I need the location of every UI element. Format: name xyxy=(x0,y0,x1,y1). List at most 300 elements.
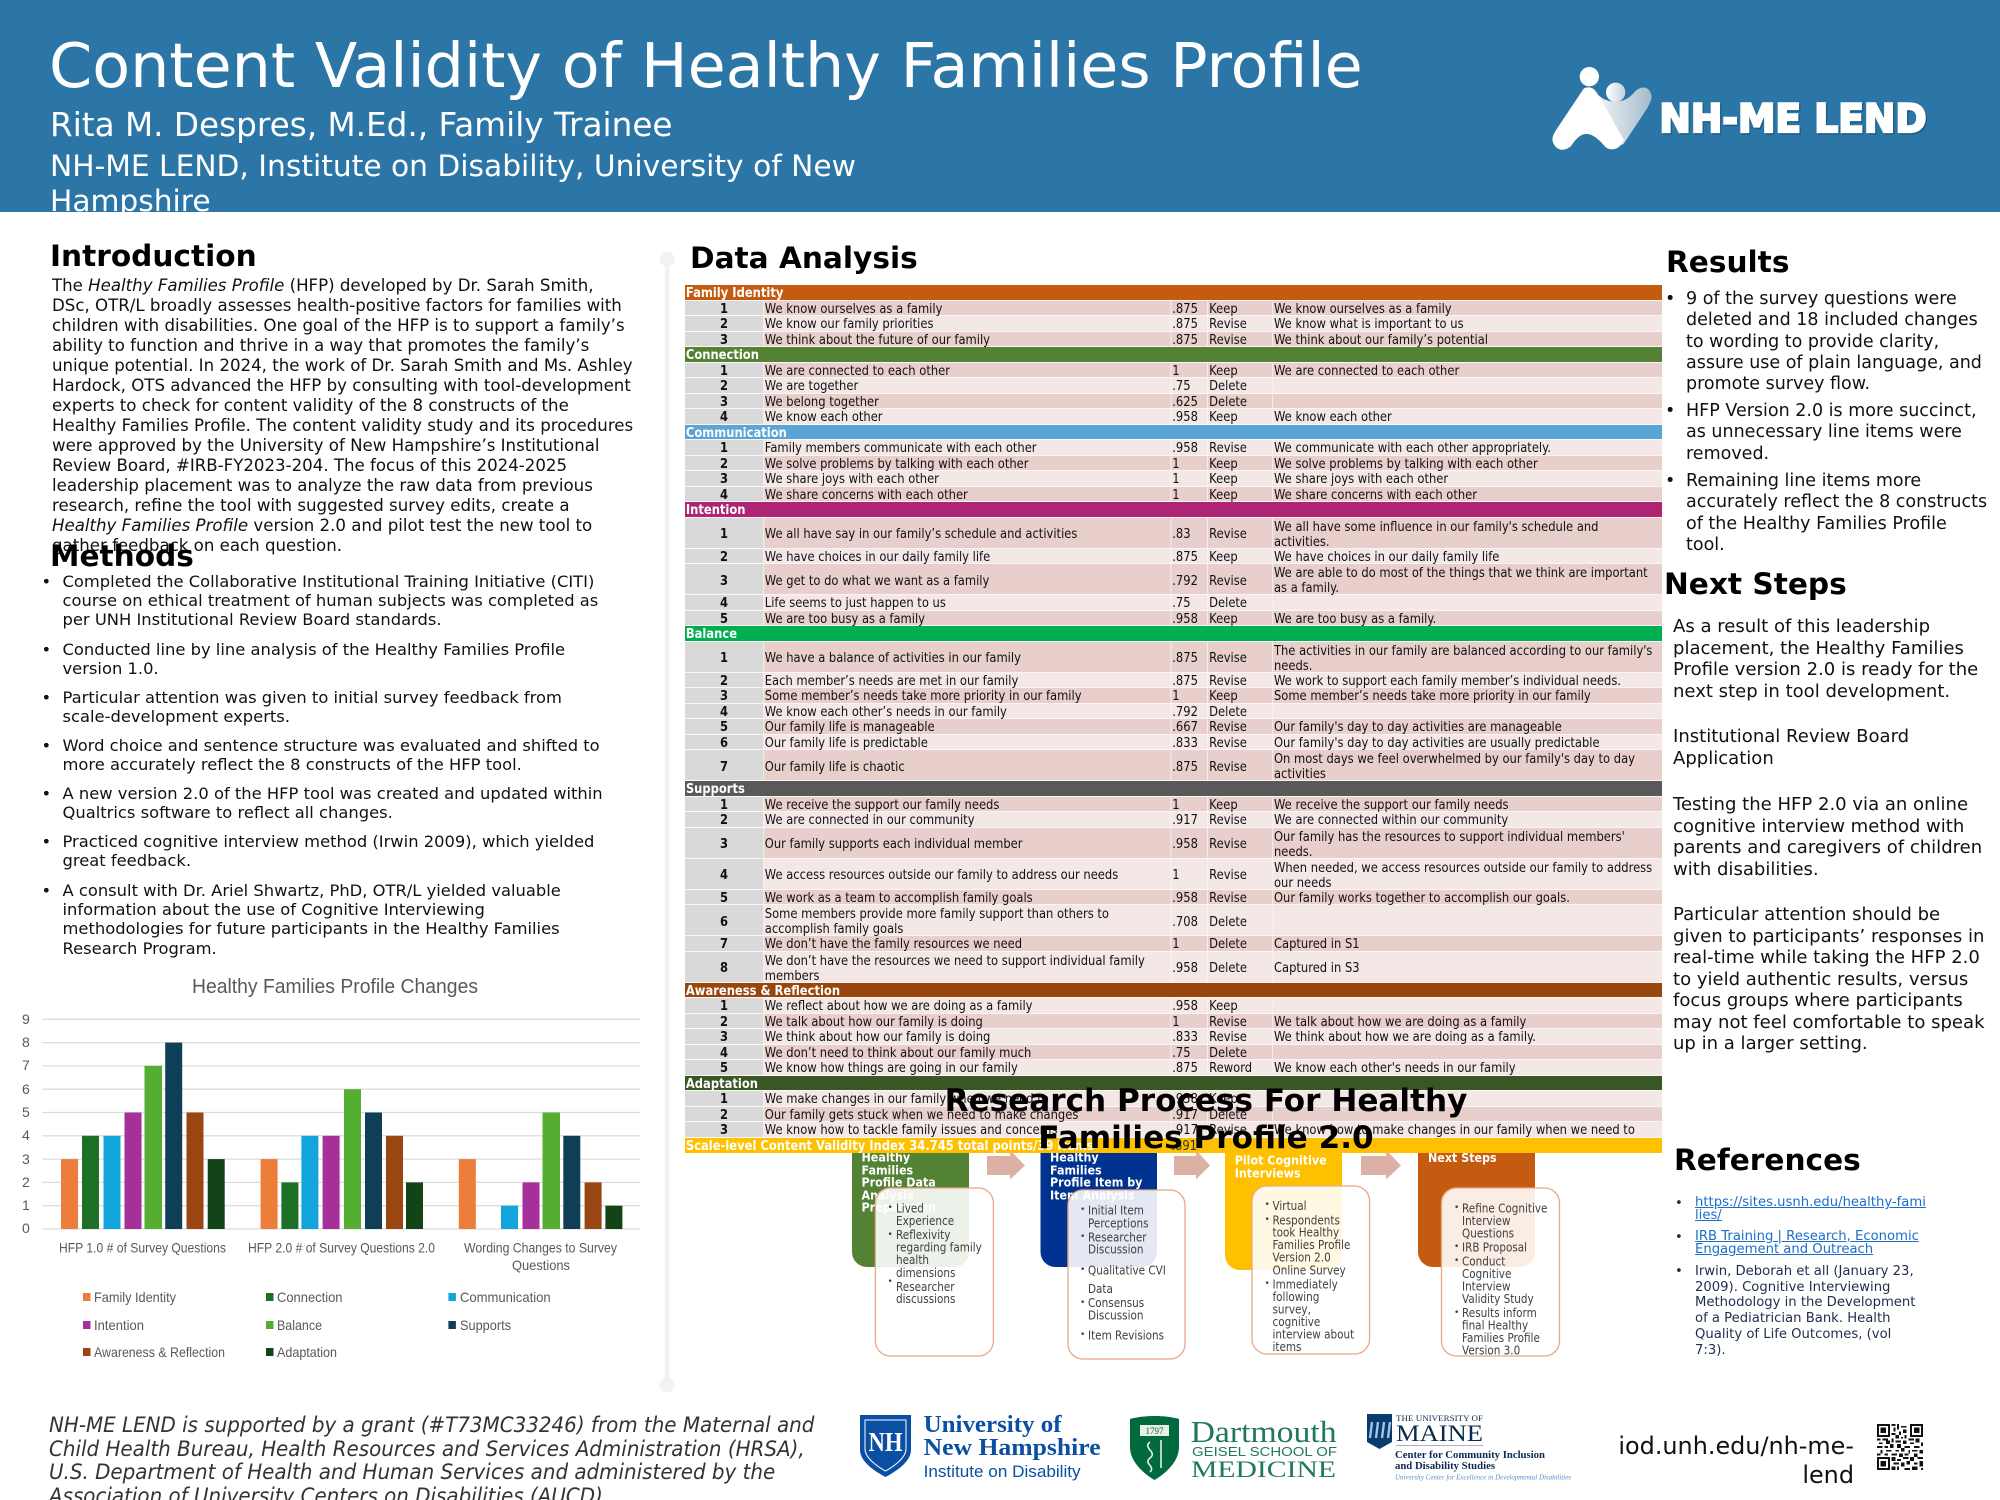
step 3: pilot cognitive interviews: took Healthy xyxy=(1272,1226,1339,1240)
divider rail xyxy=(660,252,674,1392)
logo: University of New Hampshire: University of xyxy=(924,1412,1063,1438)
section: Balance: Our family's day to day activities are usually predictable xyxy=(1274,736,1600,750)
section: Family Identity: Revise xyxy=(1209,332,1247,348)
section: Communication: Keep xyxy=(1209,456,1238,472)
intro paragraph: unique potential. In 2024, the work of Dr. Sarah Smith and Ms. Ashley xyxy=(52,356,633,375)
logo: University of New Hampshire xyxy=(860,1412,1101,1481)
section: Supports: needs. xyxy=(1274,844,1312,860)
heading: Research Process: Families Profile 2.0 xyxy=(1038,1120,1374,1156)
step 1: data analysis preparation xyxy=(852,1153,994,1357)
section: Communication: 3 xyxy=(720,472,728,487)
website link xyxy=(1618,1432,1854,1489)
section: Connection: We know each other xyxy=(765,410,883,425)
intro paragraph: Healthy Families Profile version 2.0 and pilot test the new tool to xyxy=(52,516,592,535)
section: Intention: .958 xyxy=(1172,612,1198,626)
methods list: Research Program. xyxy=(62,939,217,958)
section: Balance: Revise xyxy=(1209,651,1247,666)
section: Balance: Our family's day to day activities are manageable xyxy=(1274,720,1562,735)
section: Intention: 5 xyxy=(720,612,728,626)
section: Connection: We know each other xyxy=(1274,410,1392,425)
section: Intention: We are too busy as a family xyxy=(765,612,925,626)
intro paragraph: research, refine the tool with suggested survey edits, create a xyxy=(52,496,570,515)
methods list: scale-development experts. xyxy=(62,707,290,726)
section: Supports: 6 xyxy=(720,914,728,930)
heading: Research Process: Research Process For Healthy xyxy=(945,1083,1467,1119)
legend: Intention xyxy=(94,1317,144,1333)
section: Family Identity: We know our family priorities xyxy=(765,317,933,332)
intro paragraph: gather feedback on each question. xyxy=(52,536,342,555)
results list: promote survey flow. xyxy=(1686,374,1870,394)
section: Family Identity: We know what is important to us xyxy=(1274,317,1464,332)
section: Supports: 1 xyxy=(1172,868,1180,883)
section: Communication: .958 xyxy=(1172,441,1198,456)
step 2: item by item analysis: Profile Item by xyxy=(1050,1175,1143,1190)
category labels: Wording Changes to Survey xyxy=(464,1240,617,1256)
section: Balance: Revise xyxy=(1209,720,1247,735)
heading: Methods: Methods xyxy=(50,539,194,573)
step 1: data analysis preparation: Preparation xyxy=(862,1200,936,1215)
section: Supports: 1 xyxy=(1172,798,1180,812)
references list: Quality of Life Outcomes, (vol xyxy=(1695,1327,1891,1342)
section: Adaptation: 1 xyxy=(720,1092,728,1107)
step 1: data analysis preparation: Experience xyxy=(896,1214,954,1228)
category labels xyxy=(59,1240,617,1273)
section: Supports: Some members provide more family support than others to xyxy=(765,907,1109,922)
step 2: item by item analysis: Healthy xyxy=(1050,1150,1099,1165)
step 2: item by item analysis: Discussion xyxy=(1088,1309,1143,1323)
section: Supports: accomplish family goals xyxy=(765,922,903,937)
step 4: next steps: Version 3.0 xyxy=(1462,1344,1520,1358)
section: Family Identity: .875 xyxy=(1172,317,1198,332)
section: Supports: Our family has the resources to support individual members' xyxy=(1274,830,1625,844)
axis and gridlines: 4 xyxy=(22,1127,30,1143)
results list: as unnecessary line items were xyxy=(1686,422,1962,442)
section: Supports: 1 xyxy=(720,798,728,812)
section: Supports: Revise xyxy=(1209,868,1247,883)
section: Balance: .875 xyxy=(1172,651,1198,666)
section: Awareness & Reflection: We think about how our family is doing xyxy=(765,1030,990,1045)
step 1: data analysis preparation: Researcher xyxy=(896,1280,955,1294)
next steps text: Institutional Review Board xyxy=(1673,726,1909,747)
section: Balance: .875 xyxy=(1172,674,1198,688)
section: Supports: 4 xyxy=(720,868,728,883)
section: Supports: We receive the support our family needs xyxy=(1274,798,1509,812)
section: Adaptation: 3 xyxy=(720,1123,728,1138)
section: Balance: Our family life is predictable xyxy=(765,736,928,750)
results list: accurately reflect the 8 constructs xyxy=(1686,492,1987,512)
section: Communication: 1 xyxy=(720,441,728,456)
methods list: per UNH Institutional Review Board standards. xyxy=(62,610,442,629)
section: Intention: We all have some influence in our family's schedule and xyxy=(1274,520,1599,534)
section: Supports: .708 xyxy=(1172,914,1198,930)
section: Supports: We receive the support our family needs xyxy=(765,798,999,812)
arrow 1 xyxy=(987,1153,1025,1180)
section: Supports: .917 xyxy=(1172,813,1198,828)
section: Connection: 2 xyxy=(720,379,728,394)
step 2: item by item analysis xyxy=(1040,1153,1186,1360)
section: Supports: Revise xyxy=(1209,890,1247,906)
section: Intention: .875 xyxy=(1172,550,1198,564)
section: Balance: needs. xyxy=(1274,658,1312,674)
section: Balance: Revise xyxy=(1209,760,1247,774)
logo: Dartmouth Geisel School of Medicine xyxy=(1130,1414,1337,1482)
step 2: item by item analysis: • xyxy=(1080,1330,1085,1340)
website link: lend xyxy=(1802,1461,1854,1489)
section: Balance: We have a balance of activities in our family xyxy=(765,651,1021,666)
section: Awareness & Reflection: We know how things are going in our family xyxy=(765,1061,1018,1076)
section: Connection: We are connected to each other xyxy=(765,364,950,378)
section: Balance: 1 xyxy=(1172,689,1180,704)
methods list: information about the use of Cognitive Interviewing xyxy=(62,900,485,919)
section: Balance: 7 xyxy=(720,760,728,774)
section: Awareness & Reflection: 5 xyxy=(720,1061,728,1076)
section: Family Identity xyxy=(685,285,1662,348)
step 4: next steps: • xyxy=(1454,1308,1459,1318)
next steps text: parents and caregivers of children xyxy=(1673,837,1982,858)
results list: to wording to provide clarity, xyxy=(1686,332,1939,352)
references list: of a Pediatrician Bank. Health xyxy=(1695,1311,1891,1326)
step 3: pilot cognitive interviews: Respondents xyxy=(1272,1214,1340,1228)
next steps text: to yield authentic results, versus xyxy=(1673,968,1968,990)
step 3: pilot cognitive interviews: • xyxy=(1264,1279,1270,1289)
section: Supports: Our family supports each individual member xyxy=(765,837,1023,852)
methods list: Word choice and sentence structure was evaluated and shifted to xyxy=(62,736,600,755)
legend: Awareness & Reflection xyxy=(94,1344,225,1360)
section: Adaptation: 2 xyxy=(720,1108,728,1122)
section: Adaptation: We know how to make changes in our family when we need to xyxy=(1274,1123,1635,1138)
logo: University of Maine: University Center for Excellence in Developmental Disabilities xyxy=(1395,1474,1571,1482)
intro paragraph: Review Board, #IRB-FY2023-204. The focus of this 2024-2025 xyxy=(52,456,567,475)
results list: of the Healthy Families Profile xyxy=(1686,514,1947,534)
step 2: item by item analysis: • xyxy=(1080,1205,1085,1215)
section: Balance: Revise xyxy=(1209,736,1247,750)
section: Communication: 2 xyxy=(720,456,728,472)
step 3: pilot cognitive interviews: Interviews xyxy=(1235,1166,1301,1181)
next steps text: As a result of this leadership xyxy=(1673,616,1930,637)
scale-level content validity index row xyxy=(685,1138,1662,1153)
logo: Dartmouth Geisel School of Medicine: GEISEL SCHOOL OF xyxy=(1192,1444,1337,1459)
intro paragraph: were approved by the University of New Hampshire’s Institutional xyxy=(52,436,600,455)
results list: HFP Version 2.0 is more succinct, xyxy=(1686,401,1977,421)
section: Connection: Keep xyxy=(1209,410,1238,425)
section: Balance: We know each other’s needs in our family xyxy=(765,704,1007,720)
next steps text xyxy=(1672,616,1985,1054)
QR code xyxy=(1877,1424,1923,1470)
intro paragraph: Hardock, OTS advanced the HFP by consulting with tool-development xyxy=(52,376,631,395)
step 3: pilot cognitive interviews: • xyxy=(1264,1200,1270,1210)
section: Communication: We communicate with each other appropriately. xyxy=(1274,441,1551,456)
results list: tool. xyxy=(1686,535,1725,555)
references list: Irwin, Deborah et all (January 23, xyxy=(1695,1264,1914,1279)
section: Intention: We all have say in our family’s schedule and activities xyxy=(765,527,1077,542)
section: Awareness & Reflection: .958 xyxy=(1172,999,1198,1014)
axis and gridlines: 3 xyxy=(22,1151,30,1167)
step 1: data analysis preparation: Lived xyxy=(896,1202,924,1216)
section: Connection: Delete xyxy=(1209,394,1247,410)
step 4: next steps: • xyxy=(1454,1203,1459,1213)
section: Awareness & Reflection xyxy=(685,983,1662,1076)
next steps text: placement, the Healthy Families xyxy=(1673,638,1964,658)
section: Supports: 7 xyxy=(720,937,728,952)
section: Family Identity: .875 xyxy=(1172,302,1198,316)
bars: HFP 2.0 xyxy=(261,1089,423,1229)
affiliation xyxy=(50,148,856,212)
section: Supports: .958 xyxy=(1172,837,1198,852)
section: Supports: members xyxy=(765,968,819,984)
references list: 7:3). xyxy=(1695,1343,1726,1358)
section: Supports: Delete xyxy=(1209,914,1247,930)
section: Awareness & Reflection: .833 xyxy=(1172,1030,1198,1045)
step 2: item by item analysis: Item Revisions xyxy=(1088,1329,1164,1343)
section: Family Identity: We know ourselves as a family xyxy=(765,302,942,316)
step 1: data analysis preparation: Reflexivity xyxy=(896,1228,951,1242)
section: Intention: 1 xyxy=(720,527,728,542)
section: Intention: We get to do what we want as a family xyxy=(765,574,989,588)
section: Supports: We don’t have the resources we need to support individual family xyxy=(765,954,1145,968)
section: Family Identity: We think about our family’s potential xyxy=(1274,332,1488,348)
section: Supports: Revise xyxy=(1209,813,1247,828)
references list: Methodology in the Development xyxy=(1695,1295,1915,1310)
section: Awareness & Reflection: Revise xyxy=(1209,1030,1247,1045)
funding statement xyxy=(49,1413,814,1500)
logo: University of New Hampshire: NH xyxy=(868,1427,902,1457)
legend xyxy=(83,1289,551,1360)
step 4: next steps: Conduct xyxy=(1462,1255,1506,1269)
section: Family Identity: 2 xyxy=(720,317,728,332)
section: Supports: We work as a team to accomplish family goals xyxy=(765,890,1033,906)
section: Balance: Revise xyxy=(1209,674,1247,688)
section: Awareness & Reflection: 4 xyxy=(720,1046,728,1060)
next steps text: may not feel comfortable to speak xyxy=(1673,1012,1985,1032)
section: Intention: 2 xyxy=(720,550,728,564)
section: Connection: 1 xyxy=(720,364,728,378)
references list: https://sites.usnh.edu/healthy-fami xyxy=(1695,1195,1926,1210)
section: Connection: 1 xyxy=(1172,364,1180,378)
step 1: data analysis preparation: Analysis xyxy=(862,1188,914,1203)
intro paragraph: experts to check for content validity of the 8 constructs of the xyxy=(52,396,569,415)
step 3: pilot cognitive interviews: Immediately xyxy=(1272,1278,1338,1292)
step 3: pilot cognitive interviews: Families Profile xyxy=(1272,1238,1350,1252)
section: Intention: 3 xyxy=(720,574,728,588)
section: Family Identity: Revise xyxy=(1209,317,1247,332)
title: Content Validity of Healthy Families Profile xyxy=(49,30,1363,102)
section: Adaptation xyxy=(685,1076,1662,1138)
section: Connection: Keep xyxy=(1209,364,1238,378)
section: Supports: Delete xyxy=(1209,937,1247,952)
axis and gridlines: 5 xyxy=(22,1104,30,1120)
section: Supports: our needs xyxy=(1274,876,1332,890)
section: Awareness & Reflection: We talk about how we are doing as a family xyxy=(1274,1014,1526,1030)
intro paragraph: DSc, OTR/L broadly assesses health-positive factors for families with xyxy=(52,296,622,315)
section: Adaptation: Our family gets stuck when we need to make changes xyxy=(765,1108,1078,1122)
section: Balance: 6 xyxy=(720,736,728,750)
section: Balance xyxy=(685,626,1662,782)
logo: NH-ME LEND xyxy=(1552,67,1928,150)
header banner xyxy=(0,0,2000,212)
step 2: item by item analysis: Families xyxy=(1050,1163,1102,1178)
website link: iod.unh.edu/nh-me- xyxy=(1618,1432,1854,1460)
intro paragraph: children with disabilities. One goal of the HFP is to support a family’s xyxy=(52,316,625,335)
step 2: item by item analysis: Consensus xyxy=(1088,1296,1144,1310)
section: Communication: We share concerns with each other xyxy=(765,488,968,502)
methods list: Practiced cognitive interview method (Irwin 2009), which yielded xyxy=(62,832,594,851)
next steps text: Profile version 2.0 is ready for the xyxy=(1673,659,1978,680)
chart title: Healthy Families Profile Changes xyxy=(192,976,478,998)
methods list xyxy=(44,572,603,958)
section: Communication: 1 xyxy=(1172,456,1180,472)
step 3: pilot cognitive interviews: • xyxy=(1264,1215,1270,1225)
step 1: data analysis preparation: Profile Data xyxy=(862,1175,936,1190)
section: Supports: We don’t have the family resources we need xyxy=(765,937,1022,952)
next steps text: next step in tool development. xyxy=(1673,680,1950,702)
step 2: item by item analysis: Discussion xyxy=(1088,1243,1143,1257)
section: Intention: We have choices in our daily family life xyxy=(1274,550,1499,564)
funding statement: NH-ME LEND is supported by a grant (#T73MC33246) from the Maternal and xyxy=(49,1413,814,1438)
section: Intention xyxy=(685,502,1662,626)
intro paragraph: ability to function and thrive in a way that promotes the family’s xyxy=(52,336,589,355)
section: Awareness & Reflection: 1 xyxy=(720,999,728,1014)
step 1: data analysis preparation: • xyxy=(888,1203,893,1213)
section: Balance: Delete xyxy=(1209,704,1247,720)
step 1: data analysis preparation: Healthy xyxy=(862,1150,910,1165)
section: Intention: Life seems to just happen to us xyxy=(765,596,946,611)
step 4: next steps: Next Steps xyxy=(1428,1150,1497,1165)
category labels: HFP 2.0 # of Survey Questions 2.0 xyxy=(248,1240,435,1256)
section: Awareness & Reflection: Revise xyxy=(1209,1014,1247,1030)
references list xyxy=(1675,1195,1926,1358)
section: Supports: 8 xyxy=(720,961,728,976)
section: Awareness & Reflection: We reflect about how we are doing as a family xyxy=(765,999,1032,1014)
section: Supports: 2 xyxy=(720,813,728,828)
section: Family Identity: We think about the future of our family xyxy=(765,332,990,348)
axis and gridlines: 2 xyxy=(22,1174,30,1190)
next steps text: up in a larger setting. xyxy=(1673,1033,1868,1054)
section: Adaptation: Keep xyxy=(1209,1092,1238,1107)
step 1: data analysis preparation: regarding family xyxy=(896,1241,982,1255)
results list: deleted and 18 included changes xyxy=(1686,310,1978,330)
bars: HFP 1.0 xyxy=(61,1043,225,1229)
step 4: next steps: • xyxy=(1454,1256,1459,1266)
step 4: next steps: final Healthy xyxy=(1462,1319,1529,1333)
results list: assure use of plain language, and xyxy=(1686,353,1982,373)
section: Communication: 1 xyxy=(1172,488,1180,502)
axis and gridlines: 6 xyxy=(22,1081,30,1097)
step 3: pilot cognitive interviews: survey, xyxy=(1272,1303,1311,1317)
section: Awareness & Reflection: We know each other's needs in our family xyxy=(1274,1061,1516,1076)
heading: Next Steps: Next Steps xyxy=(1664,567,1847,601)
section: Communication: We share concerns with each other xyxy=(1274,488,1477,502)
logo: University of New Hampshire: New Hampshire xyxy=(924,1435,1101,1461)
methods list: course on ethical treatment of human subjects was completed as xyxy=(62,591,598,610)
step 3: pilot cognitive interviews: Virtual xyxy=(1272,1199,1307,1213)
section: Intention: Revise xyxy=(1209,574,1247,588)
results list: 9 of the survey questions were xyxy=(1686,289,1957,309)
section: Balance: .792 xyxy=(1172,704,1198,720)
section: Family Identity: We know ourselves as a family xyxy=(1274,302,1452,316)
category labels: HFP 1.0 # of Survey Questions xyxy=(59,1240,226,1256)
next steps text: Application xyxy=(1673,748,1774,768)
legend: Supports xyxy=(460,1317,511,1333)
section: Supports: 5 xyxy=(720,890,728,906)
section: Adaptation: Delete xyxy=(1209,1108,1247,1122)
bar chart: Healthy Families Profile Changes xyxy=(22,976,640,1360)
section: Intention: We are too busy as a family. xyxy=(1274,612,1436,626)
data analysis table xyxy=(685,285,1662,1153)
section: Intention: We are able to do most of the things that we think are important xyxy=(1274,566,1648,581)
methods list: A new version 2.0 of the HFP tool was created and updated within xyxy=(62,784,603,803)
axis and gridlines: 9 xyxy=(22,1011,30,1027)
step 3: pilot cognitive interviews xyxy=(1225,1153,1370,1355)
section: Supports: 1 xyxy=(1172,937,1180,952)
next steps text: Testing the HFP 2.0 via an online xyxy=(1673,794,1968,815)
section: Communication: We share joys with each other xyxy=(1274,472,1448,487)
section: Connection: Delete xyxy=(1209,379,1247,394)
methods list: Completed the Collaborative Institutional Training Initiative (CITI) xyxy=(62,572,594,591)
author: Rita M. Despres, M.Ed., Family Trainee xyxy=(50,106,673,144)
step 3: pilot cognitive interviews: Pilot Cognitive xyxy=(1235,1153,1327,1168)
axis and gridlines: 8 xyxy=(22,1034,30,1050)
step 4: next steps: Questions xyxy=(1462,1227,1514,1241)
section: Awareness & Reflection: 2 xyxy=(720,1014,728,1030)
legend: Balance xyxy=(277,1317,322,1333)
axis and gridlines xyxy=(22,1011,640,1236)
section: Balance: Some member’s needs take more priority in our family xyxy=(765,689,1082,704)
section: Balance: 2 xyxy=(720,674,728,688)
next steps text: focus groups where participants xyxy=(1673,990,1963,1011)
next steps text: Particular attention should be xyxy=(1673,904,1940,925)
section: Connection: We are connected to each other xyxy=(1274,364,1459,378)
section: Intention: Delete xyxy=(1209,596,1247,611)
results list: Remaining line items more xyxy=(1686,471,1921,491)
section: Balance: The activities in our family are balanced according to our family's xyxy=(1274,644,1652,658)
methods list: Particular attention was given to initial survey feedback from xyxy=(62,688,562,707)
step 2: item by item analysis: Item Analysis xyxy=(1050,1188,1135,1203)
section: Adaptation: .958 xyxy=(1172,1092,1198,1107)
logo: Dartmouth Geisel School of Medicine: 1797 xyxy=(1146,1426,1164,1436)
section: Intention: activities. xyxy=(1274,534,1330,550)
step 2: item by item analysis: • xyxy=(1080,1232,1085,1242)
heading: Introduction: Introduction xyxy=(50,239,257,273)
section: Intention: .75 xyxy=(1172,596,1191,611)
step 3: pilot cognitive interviews: Online Survey xyxy=(1272,1264,1346,1278)
references list: • xyxy=(1675,1230,1683,1245)
section: Balance: Some member’s needs take more priority in our family xyxy=(1274,689,1591,704)
step 3: pilot cognitive interviews: Version 2.0 xyxy=(1272,1251,1331,1265)
section: Awareness & Reflection: .875 xyxy=(1172,1061,1198,1076)
section: Connection xyxy=(685,347,1662,425)
section: Awareness & Reflection: We talk about how our family is doing xyxy=(765,1014,983,1030)
section: Adaptation: We make changes in our family when we need to xyxy=(765,1092,1049,1107)
funding statement: U.S. Department of Health and Human Services and administered by the xyxy=(49,1460,775,1485)
section: Supports: Revise xyxy=(1209,837,1247,852)
section: Supports: Keep xyxy=(1209,798,1238,812)
step 3: pilot cognitive interviews: interview about xyxy=(1272,1328,1355,1342)
logo: NH-ME LEND: NH-ME LEND xyxy=(1659,96,1927,142)
section: Supports: We are connected within our community xyxy=(1274,813,1508,828)
methods list: Conducted line by line analysis of the Healthy Families Profile xyxy=(62,640,565,659)
section: Awareness & Reflection: We think about how we are doing as a family. xyxy=(1274,1030,1536,1045)
legend: Family Identity xyxy=(94,1289,176,1305)
section: Adaptation: .917 xyxy=(1172,1123,1198,1138)
heading: Data Analysis: Data Analysis xyxy=(690,241,918,275)
section: Balance: We work to support each family member’s individual needs. xyxy=(1274,674,1621,688)
section: Balance: .667 xyxy=(1172,720,1198,735)
section: Communication xyxy=(685,425,1662,502)
references list: • xyxy=(1675,1196,1683,1211)
next steps text: real-time while taking the HFP 2.0 xyxy=(1673,947,1980,968)
process diagram boxes xyxy=(852,1153,1560,1360)
section: Awareness & Reflection: Keep xyxy=(1209,999,1238,1014)
